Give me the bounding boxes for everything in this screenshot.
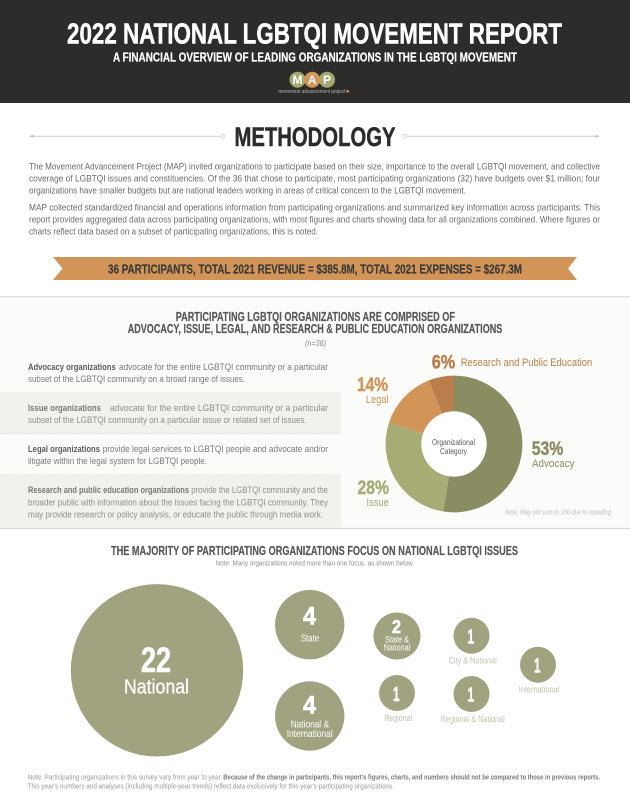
bubble: national and international 4 bbox=[275, 681, 344, 751]
bubble: state 4 bbox=[275, 590, 344, 659]
text block: issue organizations bbox=[28, 402, 328, 425]
bubble: regional and national 1: Regional & National bbox=[441, 714, 505, 725]
text block: research and public education organizations: Research and public education organizations bbox=[28, 484, 189, 495]
banner: totals bbox=[53, 257, 577, 280]
bubble: national 22: National bbox=[124, 676, 189, 698]
text block: advocacy organizations: subset of the LGBTQI community on a broad range of issues. bbox=[28, 373, 245, 384]
text block: methodology paragraphs bbox=[29, 160, 600, 236]
text block: research and public education organizations: may provide research or policy analysis, or educate the public through media work. bbox=[28, 509, 323, 520]
heading: national focus: Note: Many organizations noted more than one focus, as shown below. bbox=[216, 558, 414, 567]
icon: MAP logo: A bbox=[308, 73, 317, 87]
bubble: regional 1: Regional bbox=[384, 713, 412, 724]
footnote bbox=[28, 773, 600, 791]
bubble: international 1: 1 bbox=[534, 655, 540, 677]
bubble: state 4: State bbox=[301, 633, 319, 645]
text block: legal organizations bbox=[28, 443, 328, 466]
bubble: international 1 bbox=[519, 647, 559, 696]
header band bbox=[0, 0, 630, 103]
bubble: national and international 4: International bbox=[287, 728, 333, 740]
chart: organizational category donut bbox=[357, 351, 611, 516]
heading: methodology bbox=[29, 122, 600, 152]
text block: issue organizations: Issue organizations bbox=[28, 402, 101, 413]
label: advocacy 53%: Advocacy bbox=[532, 458, 575, 470]
text block: advocacy organizations bbox=[28, 361, 328, 384]
bubble: national 22: 22 bbox=[141, 641, 171, 680]
subtitle: A FINANCIAL OVERVIEW OF LEADING ORGANIZATIONS IN THE LGBTQI MOVEMENT bbox=[113, 50, 517, 64]
icon: MAP logo bbox=[278, 72, 350, 95]
text block: issue organizations: advocate for the entire LGBTQI community or a particular bbox=[110, 402, 328, 413]
bubble: state 4: 4 bbox=[303, 603, 316, 631]
donut center label bbox=[432, 437, 475, 456]
bubble: regional 1 bbox=[379, 675, 415, 724]
icon: MAP logo: movement advancement project bbox=[278, 89, 346, 95]
text block: issue organizations: subset of the LGBTQI community on a particular issue or related set of issues. bbox=[28, 414, 307, 425]
footnote: This year's numbers and analyses (including multiple-year trends) reflect data exclusively for this year's participating organizations. bbox=[28, 782, 394, 791]
text block: advocacy organizations: Advocacy organizations bbox=[28, 361, 116, 372]
text block: legal organizations: provide legal services to LGBTQI people and advocate and/or bbox=[103, 443, 328, 454]
heading: methodology: METHODOLOGY bbox=[234, 122, 396, 152]
label: legal 14% bbox=[357, 374, 388, 406]
text block: methodology paragraphs: charts reflect data based on a subset of participating organizations, this is noted. bbox=[29, 226, 318, 236]
bubble: national 22 bbox=[71, 584, 243, 756]
bubble: state and national 2 bbox=[374, 612, 420, 660]
banner: totals: 36 PARTICIPANTS, TOTAL 2021 REVENUE = $385.8M, TOTAL 2021 EXPENSES = $267.3M bbox=[108, 262, 522, 276]
label: advocacy 53% bbox=[532, 438, 575, 470]
text block: research and public education organizations: provide the LGBTQI community and the bbox=[191, 484, 328, 495]
label: issue 28%: Issue bbox=[366, 497, 389, 509]
label: advocacy 53%: 53% bbox=[532, 438, 563, 460]
bubble: city and national 1: City & National bbox=[449, 656, 497, 667]
label: legal 14%: 14% bbox=[357, 374, 388, 396]
bubble: national and international 4: 4 bbox=[303, 691, 316, 719]
text block: legal organizations: litigate within the legal system for LGBTQI people. bbox=[28, 455, 207, 466]
label: research 6%: 6% bbox=[432, 351, 455, 373]
text block: research and public education organizations: broader public with information about the issues facing the LGBTQI community. They bbox=[28, 496, 328, 508]
label: legal 14%: Legal bbox=[366, 394, 388, 406]
bubble: state and national 2: 2 bbox=[392, 617, 401, 637]
bubble: regional and national 1 bbox=[441, 676, 505, 725]
donut center label: Category bbox=[440, 446, 468, 456]
heading: participating organizations: PARTICIPATING LGBTQI ORGANIZATIONS ARE COMPRISED OF bbox=[176, 310, 455, 324]
heading: national focus bbox=[111, 544, 518, 567]
bubble: state and national 2: State & bbox=[385, 634, 409, 644]
donut center label: Organizational bbox=[432, 437, 475, 447]
text block: legal organizations: Legal organizations bbox=[28, 443, 100, 454]
label: research 6% bbox=[432, 351, 592, 373]
label: research 6%: Research and Public Education bbox=[461, 357, 592, 369]
footnote: Note: Participating organizations in this survey vary from year to year. bbox=[28, 773, 222, 782]
label: issue 28% bbox=[358, 477, 389, 509]
icon: MAP logo: M bbox=[292, 73, 302, 87]
bubble: city and national 1 bbox=[449, 618, 497, 667]
heading: participating organizations: (n=36) bbox=[305, 339, 326, 348]
text block: research and public education organizations bbox=[28, 484, 328, 520]
bubble: international 1: International bbox=[519, 685, 559, 696]
panel: organization categories bbox=[0, 297, 630, 528]
bubble: regional 1: 1 bbox=[393, 684, 400, 706]
icon: MAP logo: P bbox=[323, 73, 331, 87]
bubble: regional and national 1: 1 bbox=[468, 684, 474, 706]
bubble: city and national 1: 1 bbox=[468, 626, 474, 648]
heading: participating organizations bbox=[128, 310, 502, 348]
bubble: state and national 2: National bbox=[384, 642, 410, 652]
label: issue 28%: 28% bbox=[358, 477, 389, 499]
text block: methodology paragraphs: organizations have smaller budgets but are national leaders working in areas of critical concern to the LGBTQI movement. bbox=[29, 184, 466, 195]
text block: advocacy organizations: advocate for the entire LGBTQI community or a particular bbox=[119, 361, 328, 372]
bubble: national and international 4: National & bbox=[291, 719, 329, 731]
